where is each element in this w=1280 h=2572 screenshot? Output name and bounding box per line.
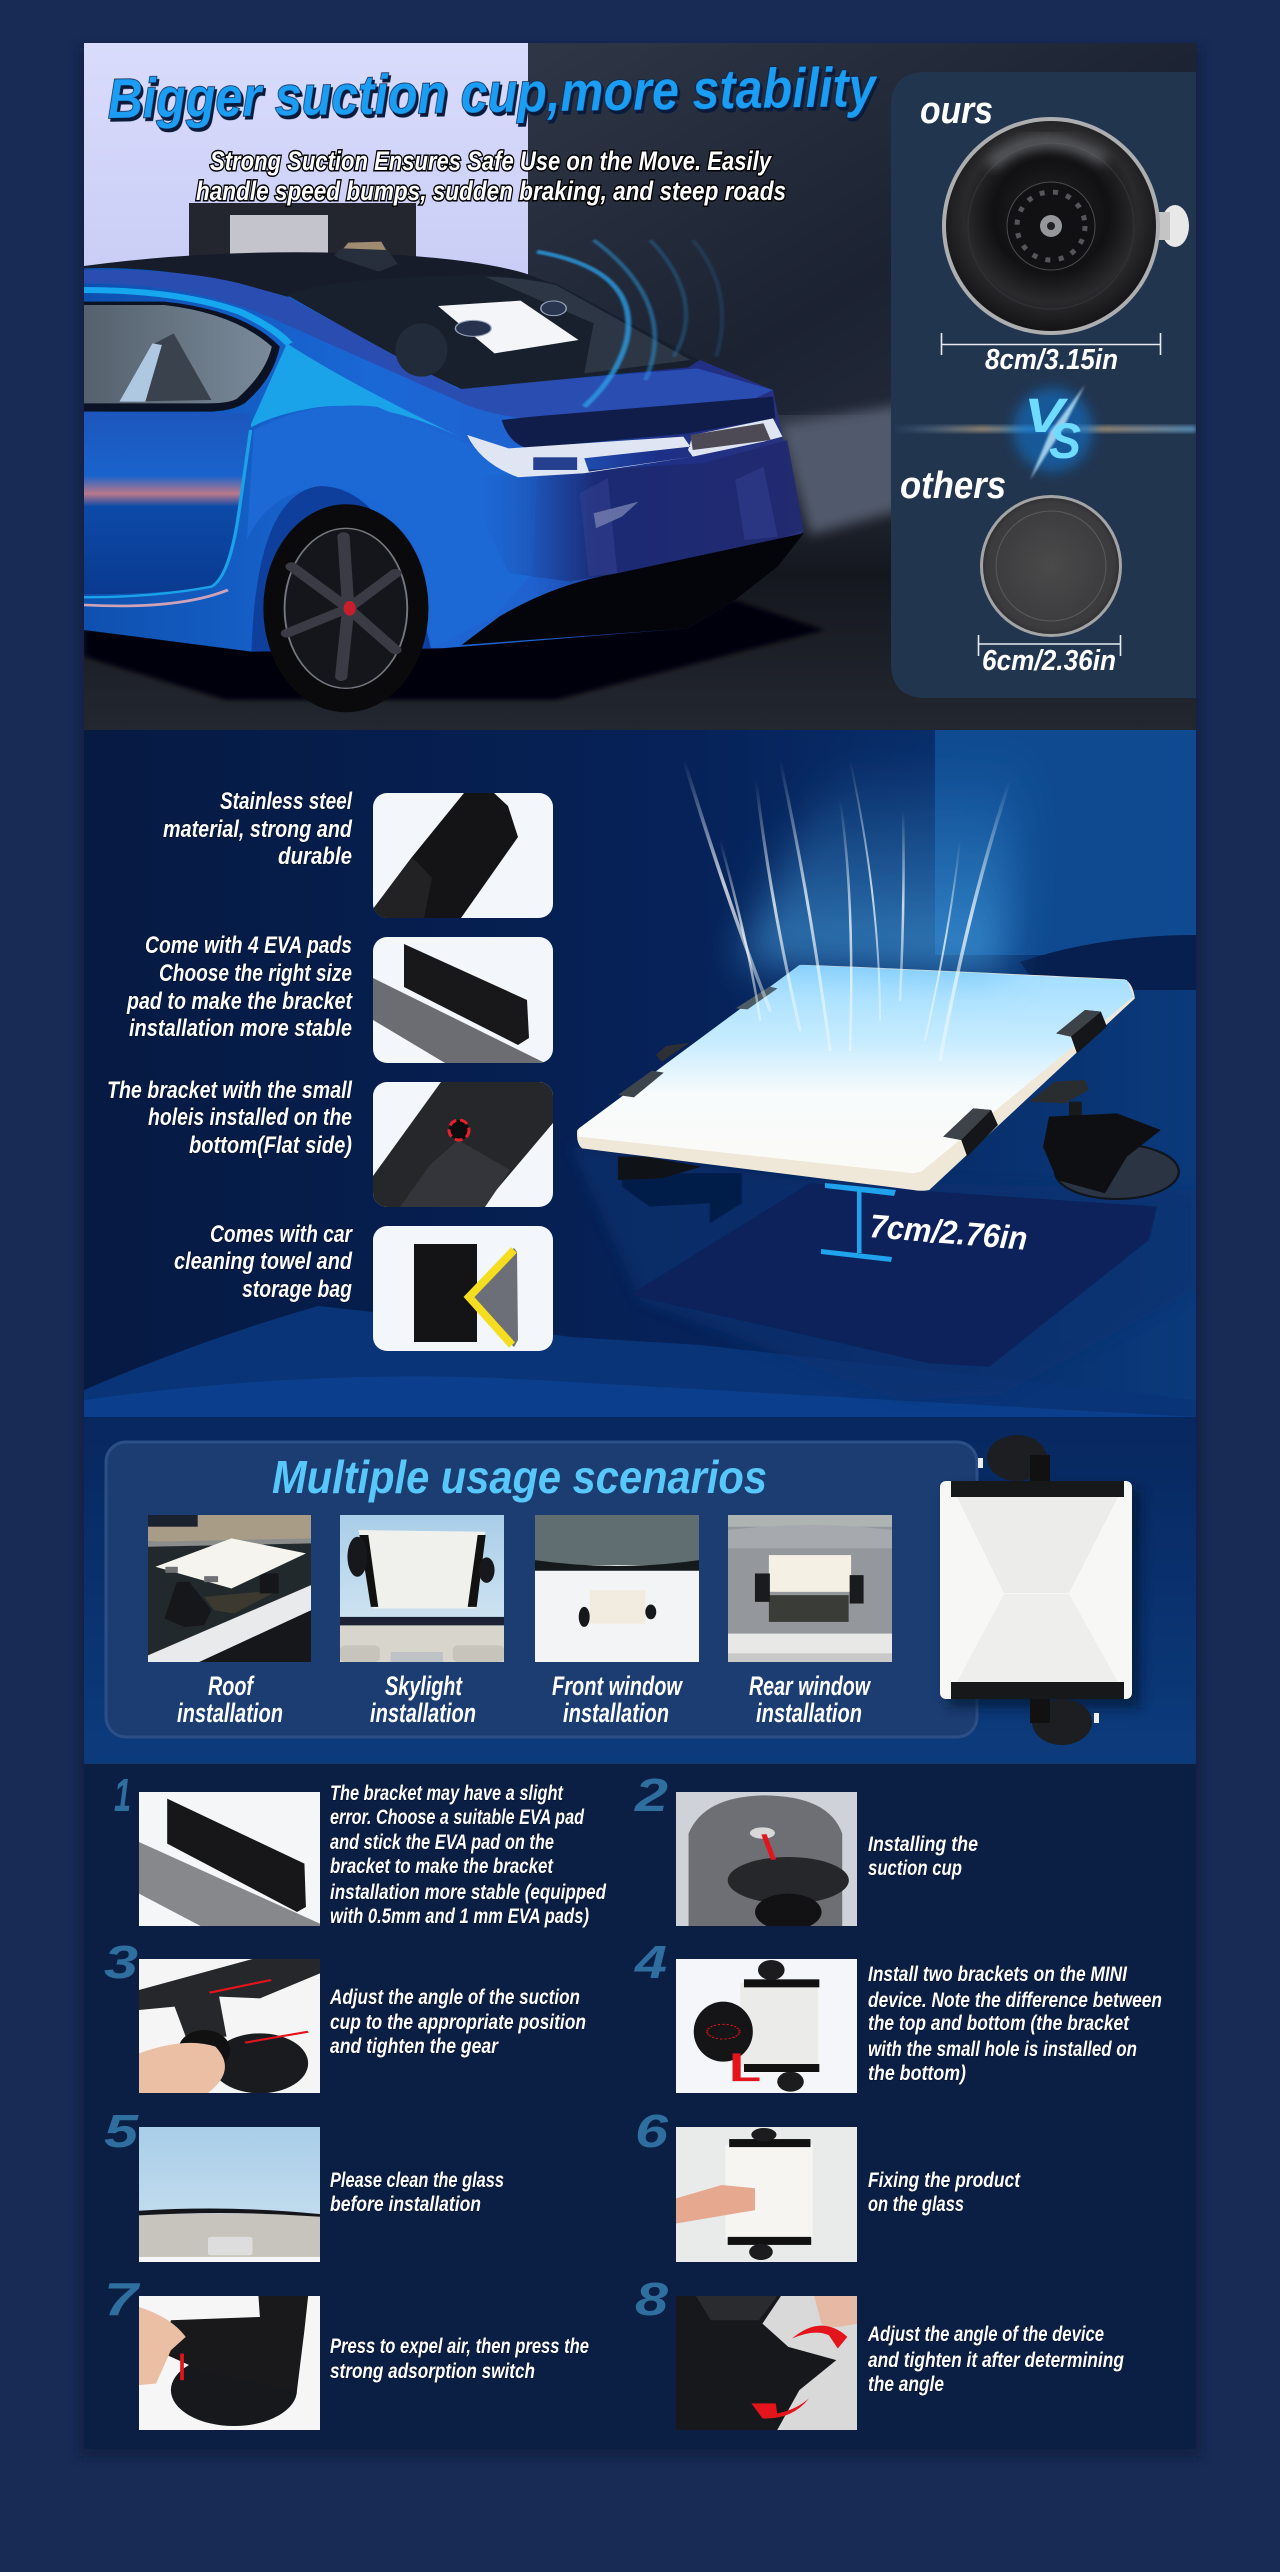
step 6: 6 bbox=[635, 2105, 669, 2157]
panel: size comparison background bbox=[891, 72, 1196, 698]
scenario labels: Front window bbox=[552, 1671, 683, 1701]
feature 3 text bbox=[107, 1077, 353, 1159]
panel: hero car scene bbox=[84, 43, 1196, 730]
brackets bbox=[736, 987, 778, 1009]
step 4: the bottom) bbox=[868, 2062, 966, 2085]
feature 4 text: cleaning towel and bbox=[174, 1248, 353, 1275]
scenario labels: installation bbox=[563, 1698, 669, 1728]
step 3: cup to the appropriate position bbox=[330, 2011, 586, 2034]
step 1: installation more stable (equipped bbox=[330, 1881, 607, 1904]
photo: rear window installation bbox=[728, 1515, 892, 1662]
step 1: 1 bbox=[114, 1769, 131, 1821]
step 7: 7 bbox=[104, 2273, 141, 2325]
label: others: others bbox=[900, 465, 1006, 507]
step 1: and stick the EVA pad on the bbox=[330, 1831, 554, 1854]
title: Bigger suction cup,more stability bbox=[107, 55, 879, 130]
step 3: 3 bbox=[104, 1936, 139, 1988]
subtitle bbox=[196, 146, 786, 206]
icon: VS badge: S bbox=[1049, 413, 1081, 469]
rear quarter bbox=[247, 406, 390, 539]
side window bbox=[84, 302, 280, 412]
scenario labels: installation bbox=[756, 1698, 862, 1728]
dimension: 8cm: 8cm/3.15in bbox=[985, 344, 1118, 376]
step 5: 5 bbox=[104, 2105, 140, 2157]
left rear plate bbox=[656, 1043, 690, 1062]
feature 1 text: durable bbox=[278, 843, 352, 870]
board, mounts and reflection bbox=[577, 965, 1179, 1367]
lower bumper bbox=[462, 533, 804, 645]
step 6 bbox=[635, 2105, 1021, 2262]
feature 4 text: storage bag bbox=[242, 1276, 352, 1303]
feature 4 text bbox=[174, 1221, 353, 1303]
step 6: on the glass bbox=[868, 2193, 964, 2216]
device: top view with suction cups bbox=[940, 1435, 1140, 1745]
wheel arch bbox=[252, 486, 431, 652]
step 4 bbox=[634, 1936, 1162, 2093]
rear glass bbox=[287, 275, 700, 389]
step 2: suction cup bbox=[868, 1857, 962, 1880]
scenario labels bbox=[177, 1671, 871, 1728]
spoiler bbox=[502, 397, 775, 448]
step 5 bbox=[104, 2105, 504, 2262]
step 1: with 0.5mm and 1 mm EVA pads) bbox=[330, 1905, 589, 1928]
step 8: and tighten it after determining bbox=[868, 2349, 1124, 2372]
scenario labels: installation bbox=[370, 1698, 476, 1728]
step 7 bbox=[104, 2273, 589, 2430]
feature 2 text: Come with 4 EVA pads bbox=[145, 932, 352, 959]
signal wave arcs bbox=[537, 240, 722, 407]
feature 3 text: holeis installed on the bbox=[148, 1104, 352, 1131]
panel: product features bbox=[84, 730, 1196, 1417]
board edge bbox=[577, 965, 1135, 1191]
step 5: before installation bbox=[330, 2193, 481, 2216]
heading: multiple usage scenarios: Multiple usage scenarios bbox=[272, 1451, 767, 1503]
cyan quarter panel bbox=[249, 343, 466, 440]
step 3: and tighten the gear bbox=[330, 2035, 500, 2058]
step 1 bbox=[114, 1769, 607, 1928]
step 4: with the small hole is installed on bbox=[868, 2038, 1137, 2061]
step 8: 8 bbox=[635, 2273, 669, 2325]
dark reflection bbox=[630, 1183, 1157, 1367]
feature 3 text: The bracket with the small bbox=[107, 1077, 353, 1104]
background: garage walls and road bbox=[84, 43, 1196, 730]
step 7: strong adsorption switch bbox=[330, 2360, 535, 2383]
feature 2 text: pad to make the bracket bbox=[126, 988, 353, 1015]
feature 3 image: bracket small hole bbox=[373, 1082, 553, 1207]
step 5: Please clean the glass bbox=[330, 2169, 504, 2192]
icon: small suction cup bbox=[980, 495, 1122, 637]
wheel bbox=[263, 504, 428, 712]
step 7: Press to expel air, then press the bbox=[330, 2335, 589, 2358]
upper deck bbox=[84, 270, 773, 420]
step 4: the top and bottom (the bracket bbox=[868, 2012, 1130, 2035]
step 2: 2 bbox=[634, 1769, 669, 1821]
body silhouette bbox=[84, 268, 804, 652]
step 3 bbox=[104, 1936, 586, 2093]
feature 1 text bbox=[163, 788, 353, 870]
icon: large suction cup bbox=[942, 117, 1189, 335]
dimension: 6cm: 6cm/2.36in bbox=[982, 645, 1116, 677]
subtitle: Strong Suction Ensures Safe Use on the Move. Easily bbox=[210, 146, 773, 176]
scenario card bbox=[106, 1442, 977, 1737]
door bbox=[84, 412, 252, 594]
step 1: error. Choose a suitable EVA pad bbox=[330, 1806, 585, 1829]
light beams above board bbox=[684, 750, 1020, 1060]
feature 2 text bbox=[126, 932, 353, 1042]
step 6: Fixing the product bbox=[868, 2169, 1021, 2192]
feature 3 text: bottom(Flat side) bbox=[189, 1132, 352, 1159]
step 4: device. Note the difference between bbox=[868, 1989, 1162, 2012]
feature 1 text: Stainless steel bbox=[220, 788, 353, 815]
car bbox=[84, 240, 824, 712]
feature 2 text: installation more stable bbox=[129, 1015, 352, 1042]
feature 1 text: material, strong and bbox=[163, 816, 353, 843]
photo: skylight installation bbox=[340, 1515, 504, 1662]
right suction cup bbox=[1055, 1144, 1179, 1199]
step 8: the angle bbox=[868, 2373, 944, 2396]
scenario labels: Rear window bbox=[749, 1671, 871, 1701]
dimension: 7cm height: 7cm/2.76in bbox=[868, 1207, 1029, 1257]
left suction cup bbox=[618, 1157, 702, 1180]
scenario labels: Roof bbox=[208, 1671, 255, 1701]
device on rear window bbox=[438, 301, 579, 353]
scenario labels: installation bbox=[177, 1698, 283, 1728]
photo: front window installation bbox=[535, 1515, 699, 1662]
feature 2 image: EVA pad bbox=[373, 937, 553, 1063]
photo: roof installation bbox=[148, 1515, 311, 1662]
dimension: 7cm height bbox=[821, 1183, 1029, 1262]
feature 1 image: steel bracket bbox=[373, 793, 553, 918]
panel: multiple usage scenarios bbox=[84, 1417, 1196, 1762]
step 8: Adjust the angle of the device bbox=[867, 2323, 1104, 2346]
subtitle: handle speed bumps, sudden braking, and steep roads bbox=[196, 176, 786, 206]
step 3: Adjust the angle of the suction bbox=[329, 1986, 580, 2009]
step 1: bracket to make the bracket bbox=[330, 1855, 554, 1878]
step 8 bbox=[635, 2273, 1124, 2430]
step 1: The bracket may have a slight bbox=[330, 1782, 564, 1805]
step 2: Installing the bbox=[868, 1833, 978, 1856]
door outline bbox=[84, 430, 251, 597]
step 4: 4 bbox=[634, 1936, 667, 1988]
scenario labels: Skylight bbox=[385, 1671, 463, 1701]
icon: VS badge: V bbox=[1024, 390, 1069, 443]
label: ours: ours bbox=[920, 90, 993, 132]
icon: VS badge bbox=[891, 385, 1196, 480]
ground shadow under car bbox=[84, 600, 824, 700]
board top bbox=[579, 965, 1134, 1173]
feature 4 image: towel and bag bbox=[373, 1226, 553, 1351]
shark fin antenna bbox=[334, 242, 398, 272]
background: blue car surface bbox=[84, 730, 1196, 1417]
feature 4 text: Comes with car bbox=[210, 1221, 353, 1248]
step 4: Install two brackets on the MINI bbox=[868, 1963, 1128, 1986]
panel: installation steps bbox=[84, 1762, 1196, 2449]
feature 2 text: Choose the right size bbox=[159, 960, 352, 987]
rear panel bbox=[501, 440, 804, 582]
roof bbox=[84, 252, 546, 283]
cyan roof line bbox=[84, 290, 289, 344]
dimension: 8cm bbox=[941, 333, 1161, 376]
step 2 bbox=[634, 1769, 978, 1930]
taillight bbox=[467, 418, 782, 477]
